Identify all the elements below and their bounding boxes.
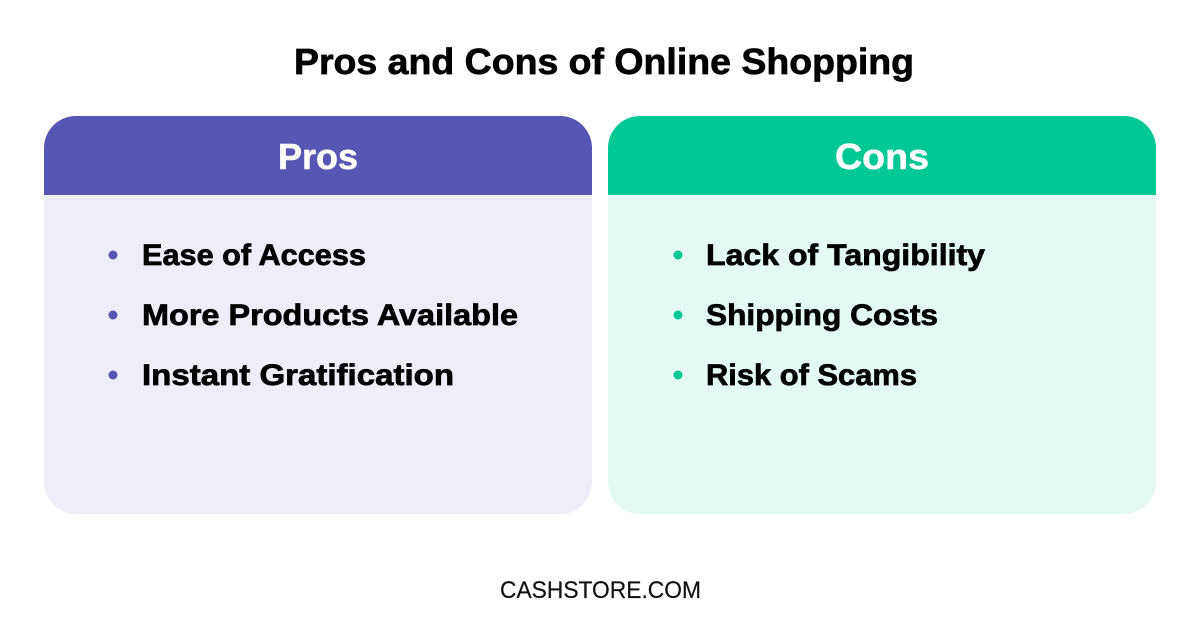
title: Pros and Cons of Online Shopping (294, 41, 914, 82)
pros panel body (44, 195, 592, 514)
panel: cons (608, 116, 1156, 514)
cons heading: Cons (835, 136, 929, 177)
pros item: more products available: More Products Available (142, 299, 518, 332)
cons item: shipping costs: Shipping Costs (706, 299, 938, 332)
footer brand: CASHSTORE.COM (500, 577, 701, 604)
pros panel header (44, 116, 592, 195)
pros heading: Pros (278, 136, 358, 177)
cons item: risk of scams: Risk of Scams (706, 359, 917, 392)
panel: pros (44, 116, 592, 514)
cons panel header (608, 116, 1156, 195)
cons item: lack of tangibility: Lack of Tangibility (706, 239, 985, 272)
cons panel body (608, 195, 1156, 514)
pros item: instant gratification: Instant Gratification (142, 359, 454, 392)
pros item: ease of access: Ease of Access (142, 239, 366, 272)
